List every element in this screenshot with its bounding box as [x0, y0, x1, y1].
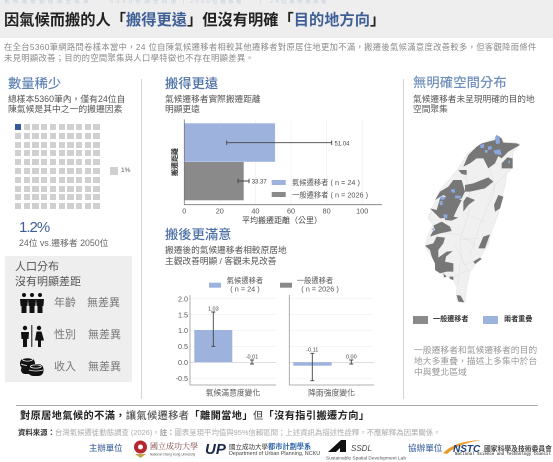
value labels — [208, 306, 357, 360]
logo: UP 都市計劃學系: 國立成功大學都市計劃學系 — [229, 442, 311, 451]
logo: SSDL: SSDL — [351, 444, 372, 453]
panel: 搬後更滿意 — [165, 227, 287, 266]
map note — [414, 344, 537, 376]
x tick labels: 100 — [356, 207, 368, 216]
icon: three people — [20, 293, 44, 313]
heading: 數量稀少 — [8, 76, 61, 90]
panel: 搬得更遠 — [165, 76, 261, 114]
description: 明顯更遠 — [165, 104, 200, 114]
bar: 一般遷移者 — [184, 162, 244, 200]
logo: SSDL — [326, 440, 406, 462]
heading: 人口分布 — [15, 261, 59, 273]
description — [165, 94, 261, 114]
x tick labels: 0 — [182, 207, 186, 216]
logo: NSTC: NSTC — [453, 444, 481, 455]
value: 無差異 — [88, 328, 121, 340]
heading: 沒有明顯差距 — [15, 276, 81, 288]
legend — [272, 178, 368, 199]
y tick labels: 2.0 — [178, 294, 188, 303]
logo: NSTC: 國家科學及技術委員會 — [484, 444, 552, 453]
logo: SSDL: Sustainable Spatial Development Lab — [326, 456, 406, 462]
logo: NCKU — [134, 440, 198, 458]
map note: 中與雙北區域 — [414, 366, 467, 376]
host label: 主辦單位 — [89, 443, 122, 453]
logo: NCKU: National Cheng Kung University — [150, 452, 196, 456]
legend: 氣候遷移者 — [227, 276, 263, 285]
township boundaries — [440, 168, 512, 285]
panel 1 bars — [194, 330, 232, 362]
regions: 兩者重疊 — [432, 136, 510, 231]
y tick labels: 1.0 — [178, 326, 188, 335]
map note: 一般遷移者和氣候遷移者的目的 — [414, 344, 537, 354]
island base — [425, 135, 520, 302]
error bars — [227, 140, 332, 183]
value labels: 0.00 — [346, 354, 357, 360]
waffle legend — [110, 167, 130, 175]
label: 收入 — [54, 360, 76, 372]
panel: 數量稀少 — [8, 76, 130, 248]
x category labels: 降雨強度變化 — [308, 388, 355, 398]
conclusion: 對原居地氣候的不滿，讓氣候遷移者「離開當地」但「沒有指引搬遷方向」 — [20, 411, 369, 422]
x tick labels: 60 — [287, 207, 295, 216]
waffle chart — [15, 124, 100, 209]
logo: UP 都市計劃學系: UP — [205, 441, 227, 458]
row: 年齡 — [20, 293, 120, 313]
icon: coins — [20, 358, 44, 376]
y axis title: 搬遷距離 — [170, 148, 179, 176]
heading: 搬得更遠 — [165, 76, 218, 90]
y tick labels: 1.5 — [178, 310, 188, 319]
legend: 一般遷移者 ( n = 2026 ) — [292, 190, 368, 199]
x tick labels: 80 — [323, 207, 331, 216]
waffle legend: 1% — [121, 167, 130, 174]
row: 性別 — [21, 325, 121, 347]
y tick labels — [176, 294, 188, 383]
row: 收入 — [20, 358, 121, 376]
description: 搬遷後的氣候遷移者相較原居地 — [165, 245, 287, 255]
x tick labels — [182, 207, 368, 216]
x axis title: 平均搬遷距離（公里） — [242, 215, 322, 225]
description: 氣候遷移者實際搬遷距離 — [165, 94, 261, 104]
organizers — [89, 440, 552, 462]
column divider left — [141, 79, 142, 399]
description: 氣候遷移者未呈現明確的目的地 — [413, 94, 535, 104]
panel: 無明確空間分布 — [413, 75, 535, 114]
map legend: 一般遷移者 — [433, 315, 468, 323]
description: 主觀改善明顯 / 客觀未見改善 — [165, 256, 276, 266]
label: 年齡 — [54, 297, 76, 309]
logo: NSTC: National Science and Technology Council — [455, 452, 551, 457]
map note: 地大多重疊，描述上多集中於台 — [414, 356, 537, 366]
x tick labels: 40 — [251, 207, 259, 216]
intro text: 在全台5360筆網路問卷樣本當中，24 位自陳氣候遷移者相較其他遷移者對原居住地更加不滿，搬遷後氣候滿意度改善較多，但客觀降雨條件 — [4, 42, 537, 52]
intro text — [4, 42, 537, 63]
regions north and central: 一般遷移者 — [430, 135, 520, 218]
description: 陳氣候是其中之一的搬遷因素 — [8, 104, 122, 114]
heading — [15, 260, 81, 288]
header band — [0, 0, 553, 38]
description — [165, 245, 287, 266]
logo: UP 都市計劃學系: Department of Urban Planning, NCKU — [229, 451, 320, 457]
panel 2 bars — [293, 362, 332, 366]
co-organizer label: 協辦單位 — [408, 443, 442, 453]
logo: UP 都市計劃學系 — [205, 441, 320, 458]
y tick labels: 0.0 — [178, 358, 188, 367]
heading: 搬後更滿意 — [165, 227, 231, 242]
legend: ( n = 24 ) — [230, 284, 260, 294]
panel: 人口分布 — [5, 256, 132, 382]
value labels: -0.01 — [246, 354, 258, 360]
icon: man and woman — [21, 325, 44, 347]
title: 因氣候而搬的人「搬得更遠」但沒有明確「目的地方向」 — [4, 12, 385, 29]
header kicker — [4, 0, 329, 5]
legend: ( n = 2026 ) — [301, 284, 339, 294]
label: 性別 — [54, 328, 76, 340]
divider — [16, 405, 538, 406]
x category labels: 氣候滿意度變化 — [206, 388, 260, 398]
description: 總樣本5360筆內，僅有24位自 — [8, 94, 125, 104]
description — [413, 94, 535, 114]
stat: 1.2%: 1.2% — [19, 218, 49, 236]
value: 無差異 — [87, 297, 120, 309]
stat caption: 24位 vs.遷移者 2050位 — [19, 238, 108, 248]
legend — [209, 276, 339, 294]
map legend: 兩者重疊 — [504, 315, 532, 323]
value labels: 51.04 — [334, 141, 350, 147]
column divider right — [403, 79, 404, 399]
description — [8, 94, 125, 114]
value labels: 33.37 — [252, 180, 267, 186]
map legend — [413, 314, 532, 324]
y tick labels: -0.5 — [176, 374, 188, 383]
value labels: 1.03 — [208, 306, 219, 312]
y tick labels: 0.5 — [178, 342, 188, 351]
value labels — [252, 141, 350, 186]
source note: 資料來源：台灣氣候遷徙動態調查 (2026)。註：圖表呈現平均值與95%信賴區間；上述資訊為描述性詮釋，不應解釋為因果關係。 — [18, 428, 441, 436]
description: 空間聚集 — [413, 104, 448, 114]
value labels: -0.11 — [306, 348, 318, 354]
bar: 氣候遷移者 — [184, 123, 275, 162]
value: 無差異 — [88, 360, 121, 372]
intro text: 未見明顯改善；目的的空間聚集與人口學特徵也不存在明顯差異。 — [4, 53, 254, 63]
regions south: 一般遷移者 — [425, 215, 490, 302]
logo: NCKU: 國立成功大學 — [150, 441, 198, 452]
legend: 一般遷移者 — [297, 276, 333, 285]
x category labels — [206, 388, 355, 398]
legend: 氣候遷移者 ( n = 24 ) — [292, 178, 360, 187]
x tick labels: 20 — [216, 207, 224, 216]
logo: NSTC — [443, 440, 552, 457]
heading: 無明確空間分布 — [413, 75, 507, 90]
